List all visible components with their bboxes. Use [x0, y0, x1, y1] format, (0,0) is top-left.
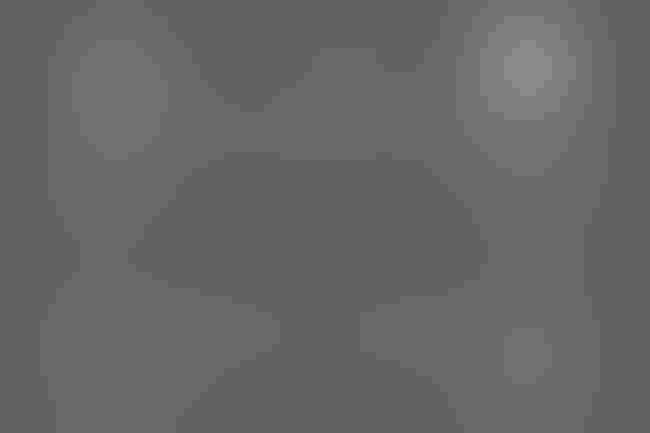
- light blob: lower right: [504, 328, 552, 384]
- light blob: upper left: [72, 40, 168, 160]
- dark region: top notch: [144, 0, 448, 112]
- dark region: right edge: [584, 0, 650, 433]
- dark region: centre and bottom: [128, 152, 488, 433]
- dark region: left edge: [0, 0, 96, 433]
- light blob: upper right core: [504, 40, 552, 96]
- light blob: upper right middle ring: [480, 16, 576, 120]
- light blob: upper right outer ring: [456, 0, 592, 176]
